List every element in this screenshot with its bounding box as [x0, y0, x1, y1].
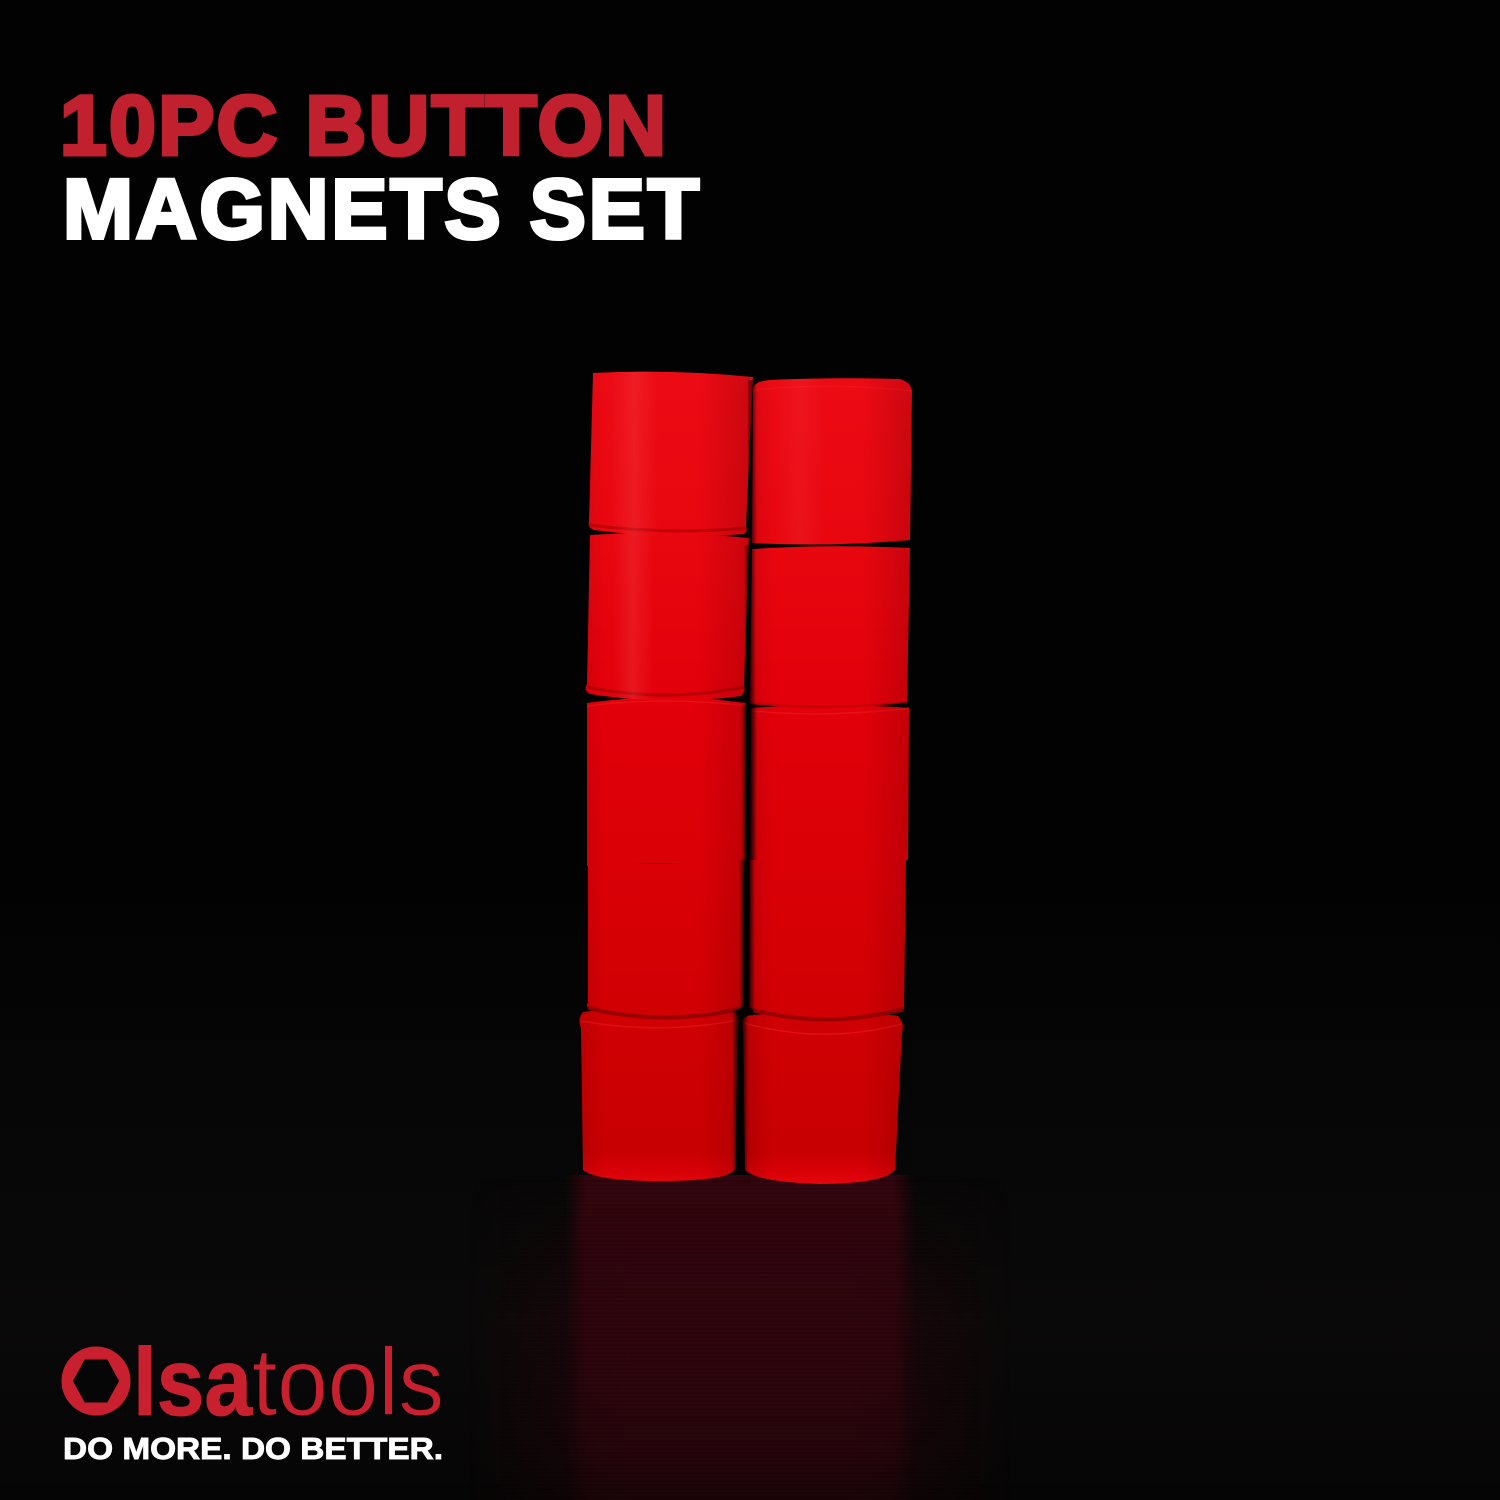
magnet right 2	[750, 546, 910, 708]
magnet left 3	[587, 698, 746, 866]
magnet right 1	[752, 375, 912, 550]
product photo: ten red button magnets in two stacks	[578, 368, 912, 1184]
magnet left 2	[586, 530, 749, 705]
magnet right 4	[748, 856, 906, 1020]
right magnet stack	[742, 375, 912, 1184]
title	[60, 78, 699, 256]
magnet right 5	[742, 1011, 903, 1184]
magnet left 4	[587, 860, 744, 1018]
dark seam between the two stacks	[732, 380, 757, 1175]
magnet right 3	[750, 705, 909, 867]
logo letters lsa: lsa	[133, 1329, 253, 1436]
logo letters tools: tools	[252, 1329, 444, 1436]
logo wordmark	[62, 1329, 444, 1436]
logo: Olsatools with tagline	[62, 1329, 444, 1466]
title line 1: 10PC BUTTON	[60, 78, 666, 172]
left magnet stack	[578, 368, 753, 1184]
floor reflection of the magnets	[527, 1175, 952, 1500]
title line 2: MAGNETS SET	[63, 162, 699, 256]
magnet left 5	[579, 1007, 739, 1181]
logo letter O with hexagonal counter: O	[70, 1344, 122, 1418]
tagline: DO MORE. DO BETTER.	[63, 1432, 443, 1466]
left stack edge shading	[578, 372, 750, 1184]
right stack edge shading	[748, 378, 912, 1184]
magnet left 1	[589, 368, 753, 538]
